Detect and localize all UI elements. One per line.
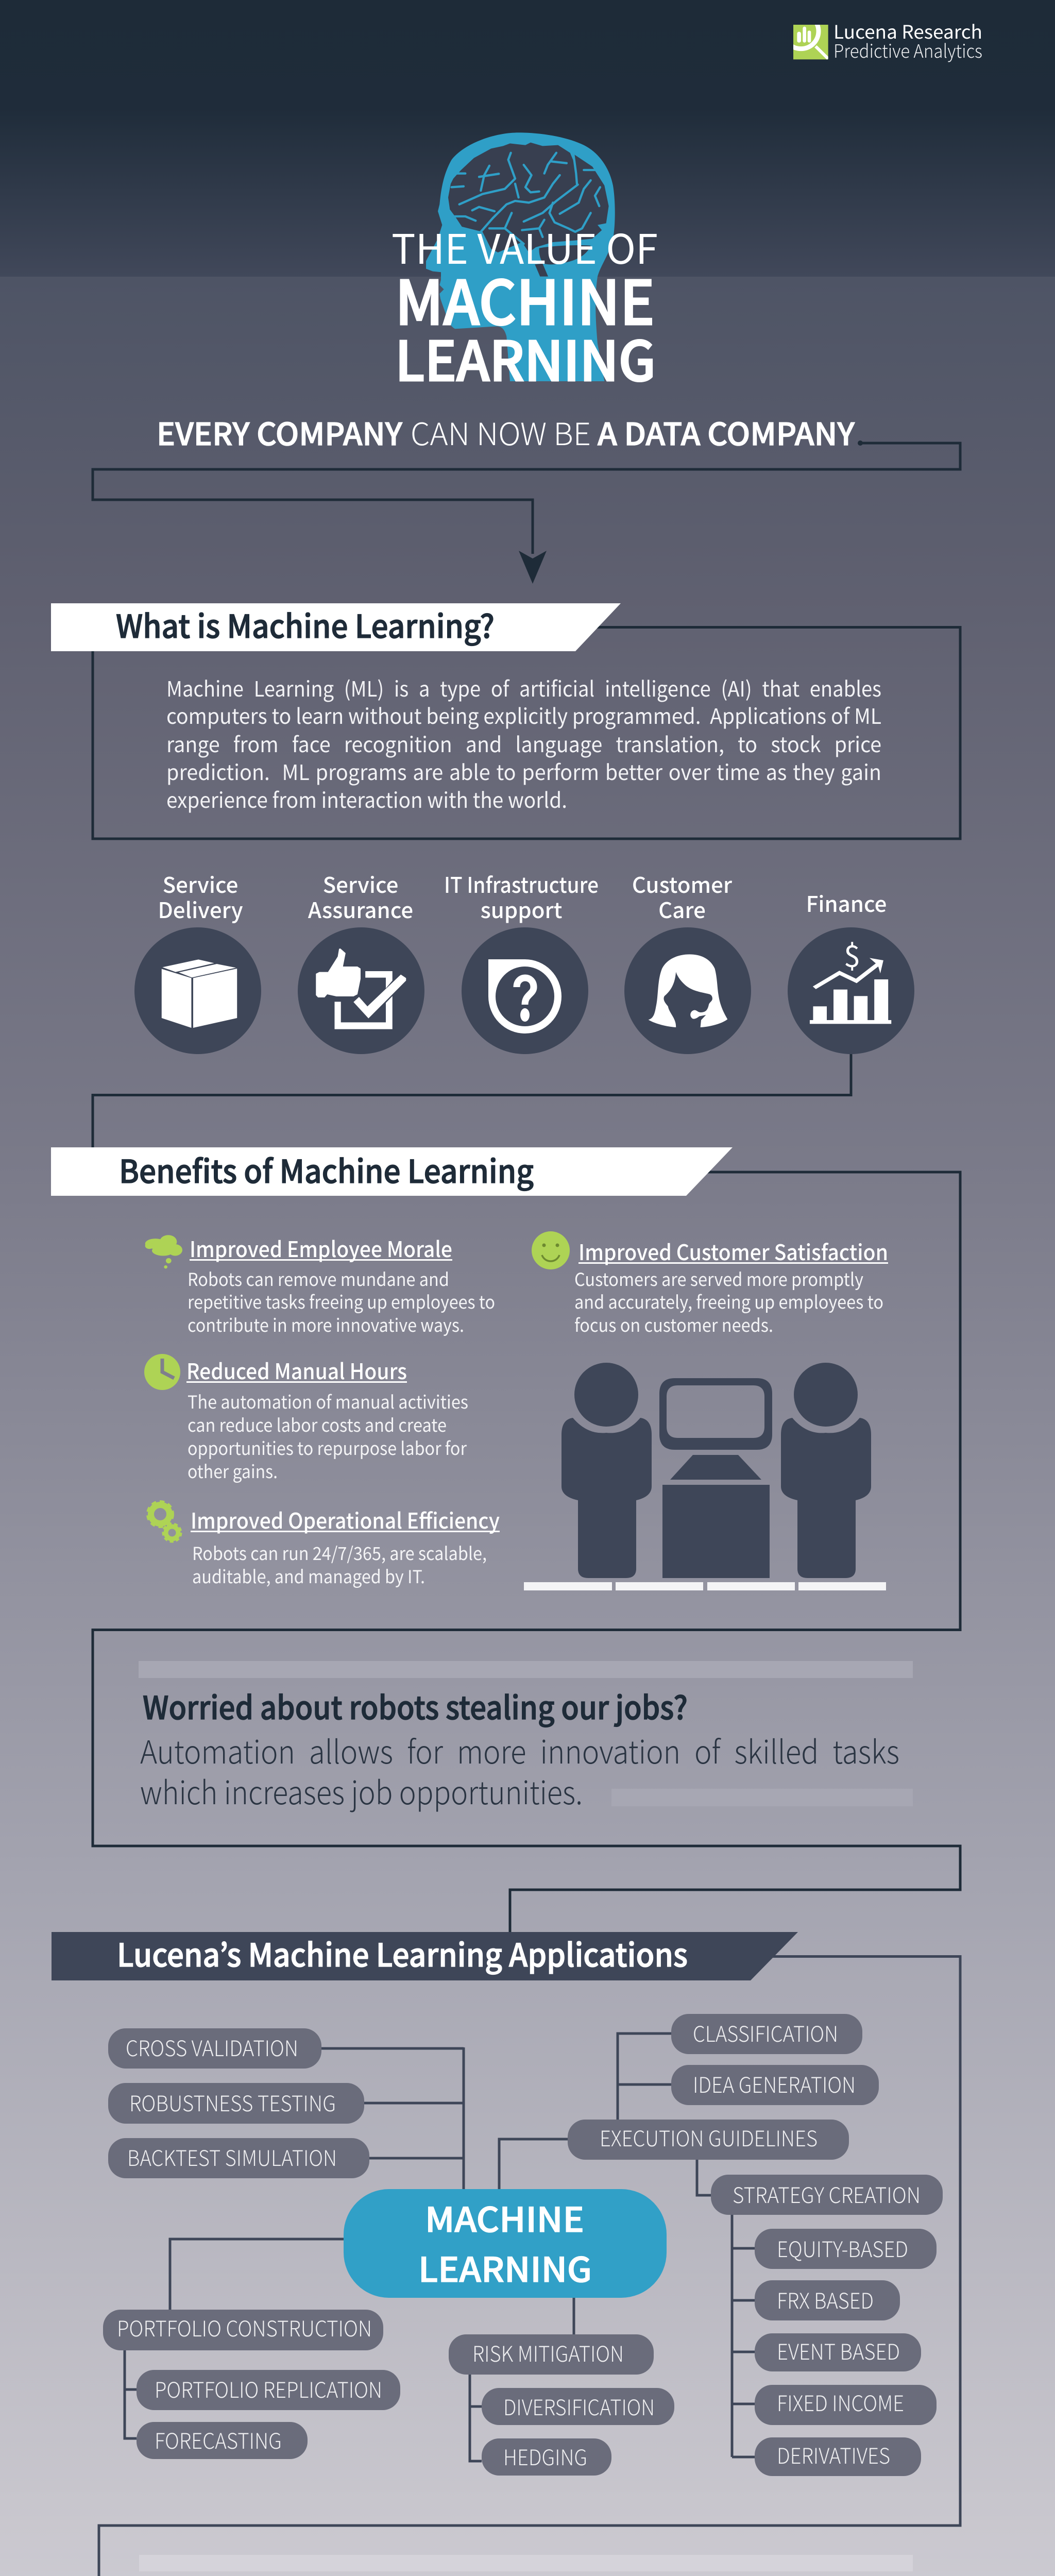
icon: cloud (145, 1235, 182, 1268)
pill: risk mitigation: RISK MITIGATION (472, 2337, 624, 2368)
pill: derivatives: DERIVATIVES (777, 2439, 890, 2470)
icon: IT infrastructure support: support (481, 893, 562, 925)
benefit: reduced manual hours: other gains. (188, 1458, 278, 1484)
pill: execution guidelines: EXECUTION GUIDELINES (600, 2122, 818, 2153)
pill: derivatives (755, 2437, 921, 2476)
icon: gears (148, 1502, 181, 1541)
benefit: reduced manual hours: The automation of manual activities (188, 1388, 468, 1414)
heading banner: Benefits of Machine Learning (119, 1146, 534, 1192)
mind map connectors (125, 2033, 755, 2461)
pill: forecasting: FORECASTING (155, 2424, 282, 2455)
paragraph: range from face recognition and language translation, to stock price (166, 727, 881, 758)
benefit: employee morale (188, 1232, 495, 1337)
pill: hedging: HEDGING (503, 2441, 587, 2472)
paragraph: computers to learn without being explicitly programmed. Applications of ML (166, 699, 881, 730)
icon: service assurance: Assurance (308, 893, 413, 925)
benefit: reduced manual hours: Reduced Manual Hours (186, 1354, 407, 1386)
pill: machine learning center: LEARNING (418, 2243, 592, 2292)
company name: Lucena Research (833, 18, 982, 44)
pill: robustness testing: ROBUSTNESS TESTING (129, 2087, 336, 2118)
paragraph: experience from interaction with the world. (166, 783, 567, 814)
icon: customer care: Customer (632, 868, 733, 900)
callout: robots and jobs: Worried about robots stealing our jobs? (143, 1682, 688, 1728)
icon: IT infrastructure support (444, 868, 599, 1054)
icon: service delivery: Delivery (158, 893, 243, 925)
heading banner: What is Machine Learning? (116, 601, 495, 647)
pill: idea generation (671, 2065, 879, 2105)
callout: robots and jobs: Automation allows for more innovation of skilled tasks (140, 1726, 899, 1773)
benefit: operational efficiency: auditable, and managed by IT. (192, 1563, 425, 1589)
benefit: reduced manual hours: can reduce labor costs and create (188, 1411, 447, 1437)
benefit: operational efficiency (191, 1504, 500, 1589)
pill: machine learning center (344, 2189, 667, 2298)
pill: backtest simulation: BACKTEST SIMULATION (127, 2141, 337, 2173)
icon: service delivery: Service (163, 868, 238, 900)
heading banner (51, 1146, 733, 1196)
paragraph: prediction. ML programs are able to perform better over time as they gain (166, 755, 881, 786)
benefit: reduced manual hours (186, 1354, 468, 1484)
tagline: CAN NOW BE (411, 410, 591, 454)
title line 3: LEARNING (395, 317, 656, 397)
icon: logo magnifier (793, 25, 828, 60)
heading banner (51, 601, 621, 651)
title line 2: MACHINE (395, 254, 655, 342)
icon: IT infrastructure support: IT Infrastructure (444, 868, 599, 900)
icon: head with brain (426, 132, 615, 381)
pill: strategy creation: STRATEGY CREATION (733, 2178, 921, 2210)
tagline (157, 410, 855, 454)
icon: finance (788, 887, 914, 1054)
benefit: employee morale: Robots can remove mundane and (188, 1265, 449, 1292)
pill: backtest simulation (108, 2138, 369, 2178)
benefit: customer satisfaction: Improved Customer Satisfaction (578, 1235, 888, 1267)
callout: robots and jobs (139, 1661, 913, 1814)
icon: smiley (532, 1231, 570, 1269)
callout: robots and jobs: which increases job opportunities. (140, 1767, 583, 1814)
pill: forecasting (137, 2422, 308, 2459)
pill: idea generation: IDEA GENERATION (693, 2068, 856, 2099)
pill: portfolio construction: PORTFOLIO CONSTRUCTION (117, 2312, 372, 2343)
company tagline: Predictive Analytics (833, 37, 982, 63)
pill: fixed income (755, 2385, 937, 2425)
icon: customer care: Care (658, 893, 706, 925)
icon: service assurance: Service (323, 868, 398, 900)
benefit: operational efficiency: Improved Operational Efficiency (191, 1504, 500, 1535)
icon: finance: Finance (806, 887, 887, 919)
benefit: customer satisfaction: focus on customer needs. (574, 1311, 773, 1337)
pill: strategy creation (711, 2175, 943, 2215)
pill: frx based (755, 2280, 900, 2320)
benefit: employee morale: Improved Employee Morale (190, 1232, 452, 1264)
illustration: people at computer (524, 1363, 886, 1590)
heading banner: Lucena’s Machine Learning Applications (117, 1929, 688, 1976)
benefit: customer satisfaction (574, 1235, 888, 1337)
panel: use case icons (134, 868, 914, 1054)
pill: classification: CLASSIFICATION (693, 2017, 838, 2048)
benefit: customer satisfaction: Customers are served more promptly (574, 1265, 863, 1292)
pill: fixed income: FIXED INCOME (777, 2386, 904, 2418)
benefit: employee morale: repetitive tasks freeing up employees to (188, 1288, 495, 1314)
pill: portfolio replication: PORTFOLIO REPLICATION (155, 2373, 382, 2404)
icon: clock (144, 1354, 180, 1390)
benefit: employee morale: contribute in more innovative ways. (188, 1311, 464, 1337)
icon: finance: $ (844, 933, 860, 976)
pill: event based (755, 2333, 921, 2371)
arrow: finance connector (93, 1054, 851, 1149)
pill: execution guidelines (568, 2120, 849, 2160)
benefit: reduced manual hours: opportunities to repurpose labor for (188, 1434, 467, 1461)
pill: cross validation: CROSS VALIDATION (126, 2031, 298, 2063)
tagline: A DATA COMPANY (598, 410, 855, 454)
panel: benefits of machine learning (51, 1146, 960, 1933)
tagline: EVERY COMPANY (157, 410, 403, 454)
arrow: tagline connector (93, 440, 960, 584)
pill: machine learning center: MACHINE (425, 2193, 584, 2242)
panel: machine learning applications (52, 1929, 960, 2576)
logo: Lucena Research (793, 24, 982, 62)
pill: robustness testing (108, 2083, 364, 2124)
panel: what is machine learning (51, 601, 960, 839)
pill: event based: EVENT BASED (777, 2335, 900, 2366)
pill: diversification: DIVERSIFICATION (503, 2391, 655, 2422)
paragraph: Machine Learning (ML) is a type of artificial intelligence (AI) that enables (166, 672, 881, 703)
callout: leverage data (139, 2555, 913, 2576)
icon: customer care (624, 868, 751, 1054)
title (392, 216, 658, 397)
paragraph (166, 672, 881, 814)
pill: hedging (482, 2438, 611, 2476)
pill: cross validation (108, 2028, 321, 2069)
icon: service assurance (298, 868, 424, 1054)
pill: risk mitigation (449, 2334, 654, 2375)
pill: equity-based: EQUITY-BASED (777, 2232, 908, 2264)
pill: frx based: FRX BASED (777, 2284, 874, 2315)
icon: service delivery (134, 868, 261, 1054)
pill: classification (671, 2014, 862, 2054)
title line 1: THE VALUE OF (392, 216, 658, 276)
benefit: customer satisfaction: and accurately, freeing up employees to (574, 1288, 883, 1314)
pill: equity-based (755, 2229, 937, 2269)
benefit: operational efficiency: Robots can run 24/7/365, are scalable, (192, 1539, 487, 1566)
